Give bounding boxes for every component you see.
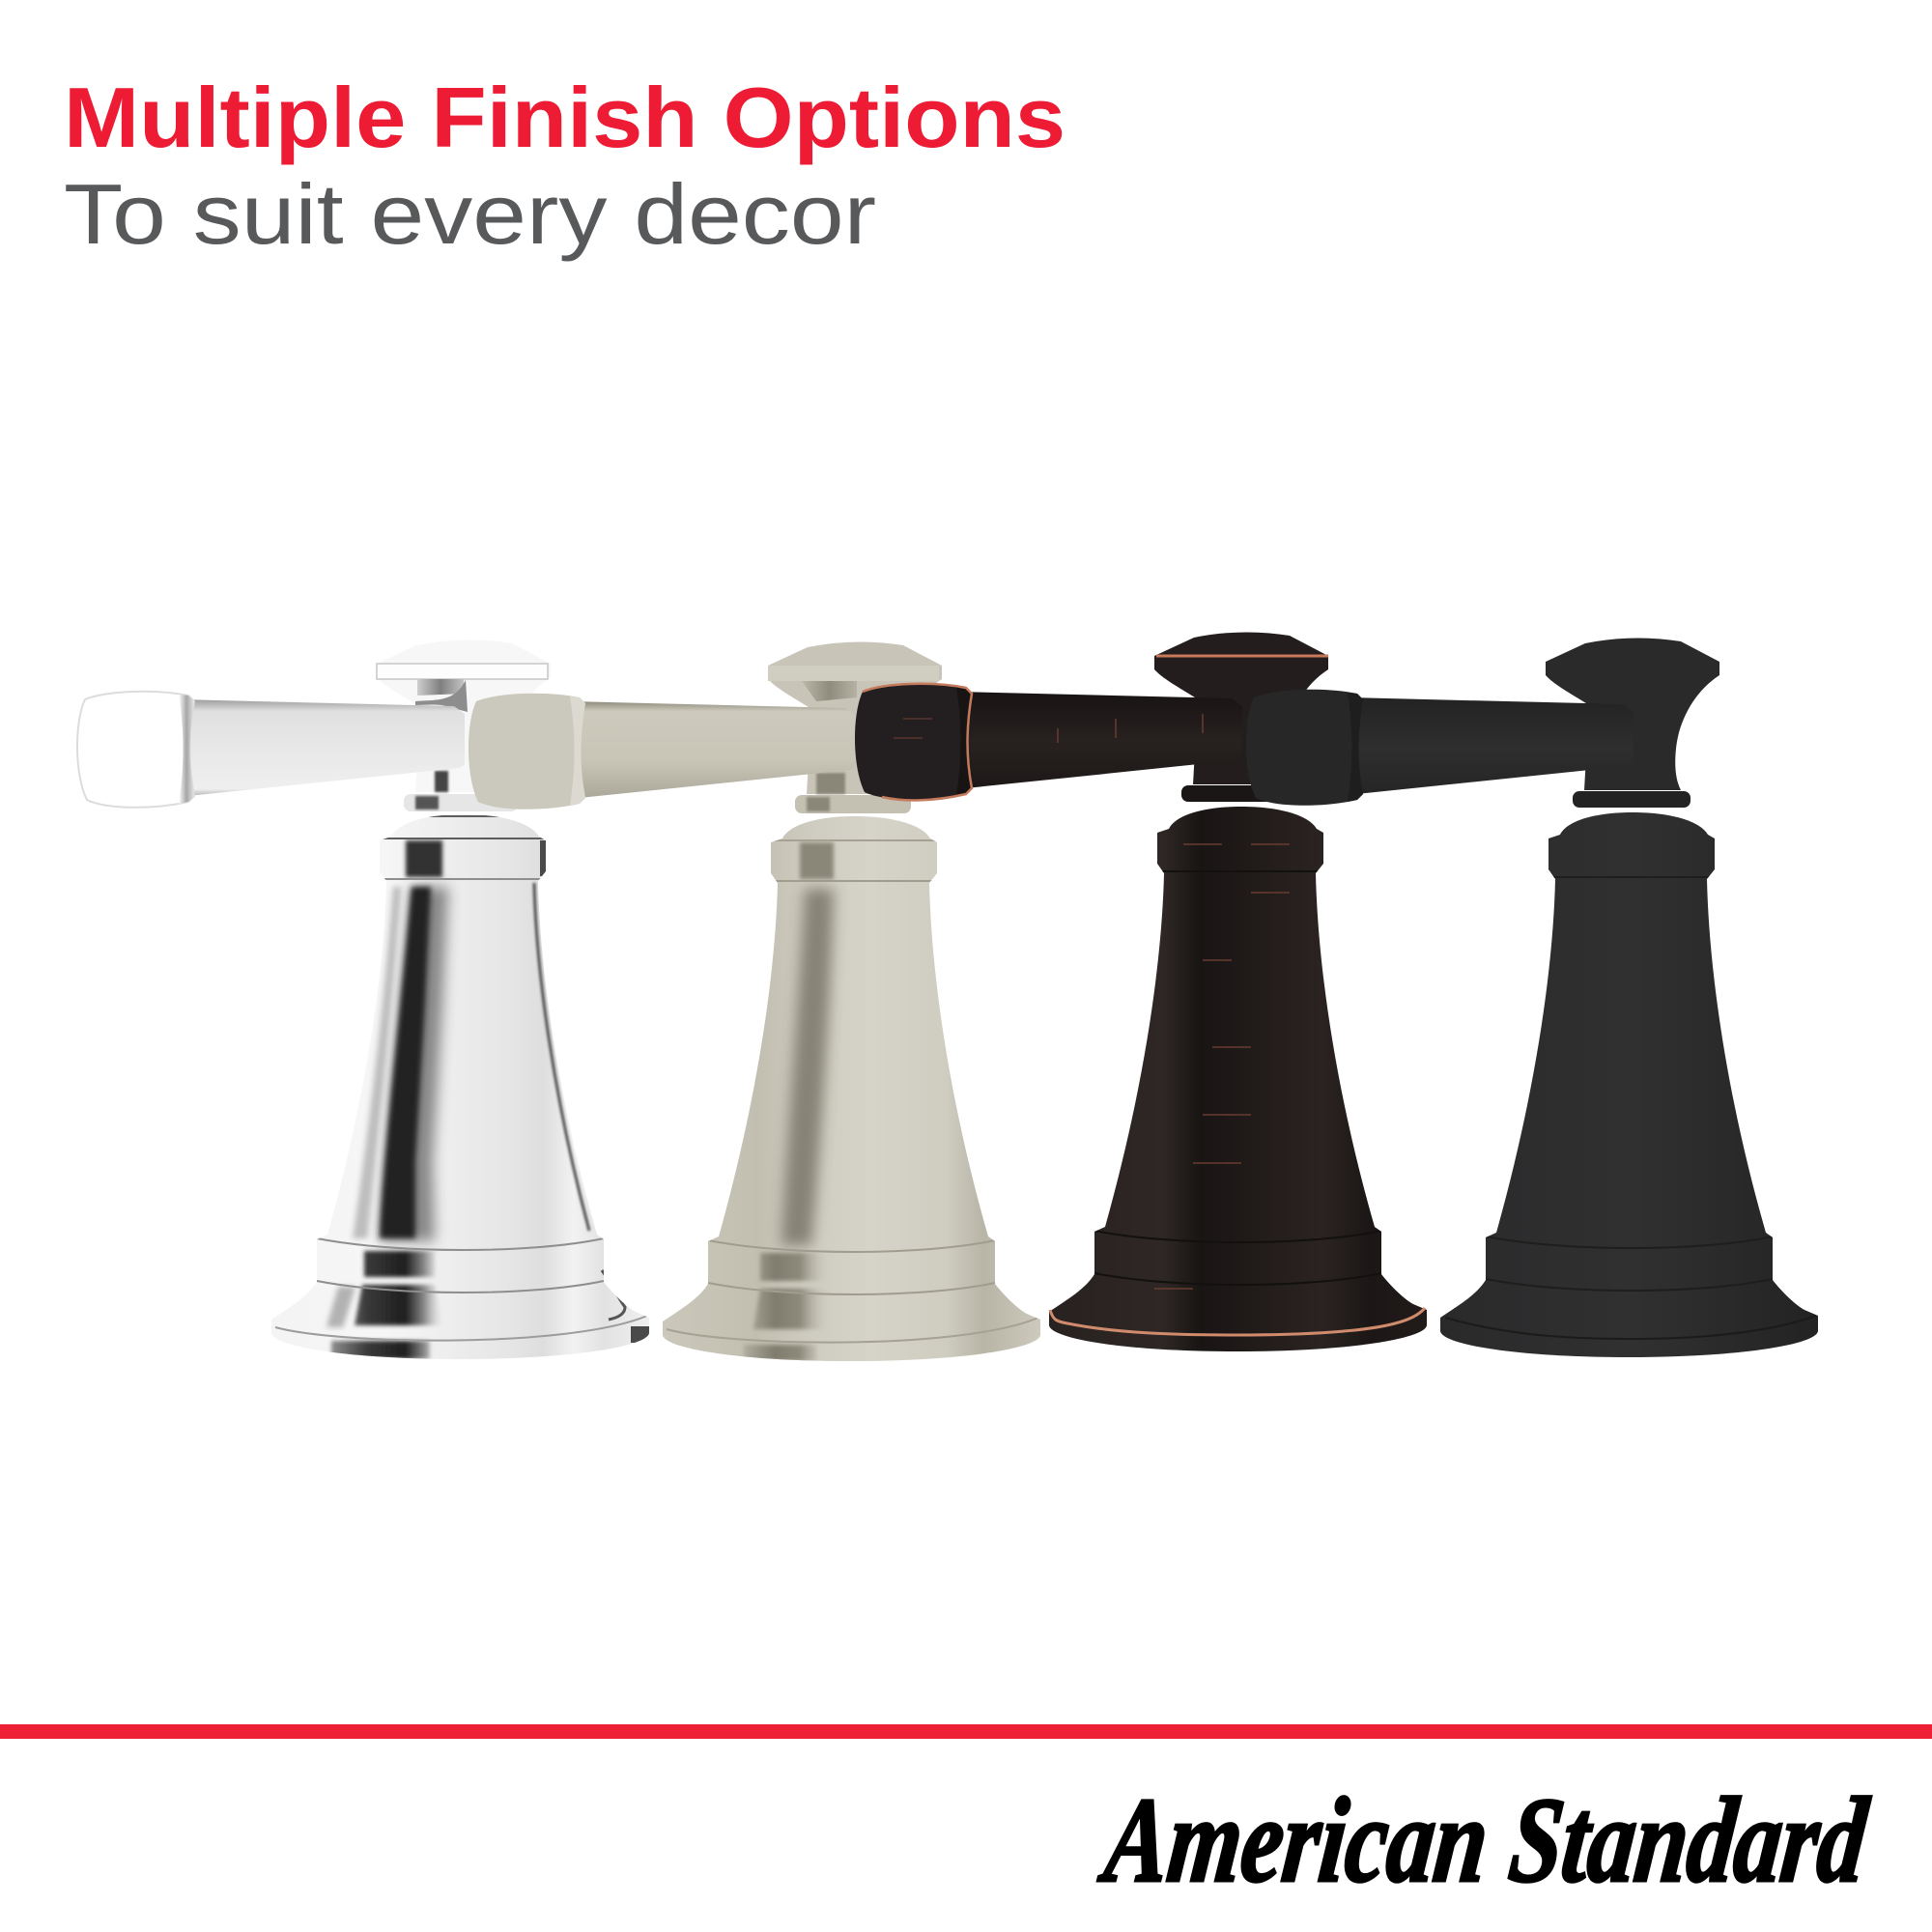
handle: matte black [1246, 638, 1818, 1357]
red divider bar [0, 1724, 1932, 1739]
subheading: To suit every decor [64, 166, 876, 262]
heading: Multiple Finish Options [64, 70, 1065, 165]
handle: polished chrome [77, 639, 649, 1359]
handle: oil-rubbed bronze [855, 632, 1427, 1351]
handle: brushed nickel [469, 641, 1040, 1361]
